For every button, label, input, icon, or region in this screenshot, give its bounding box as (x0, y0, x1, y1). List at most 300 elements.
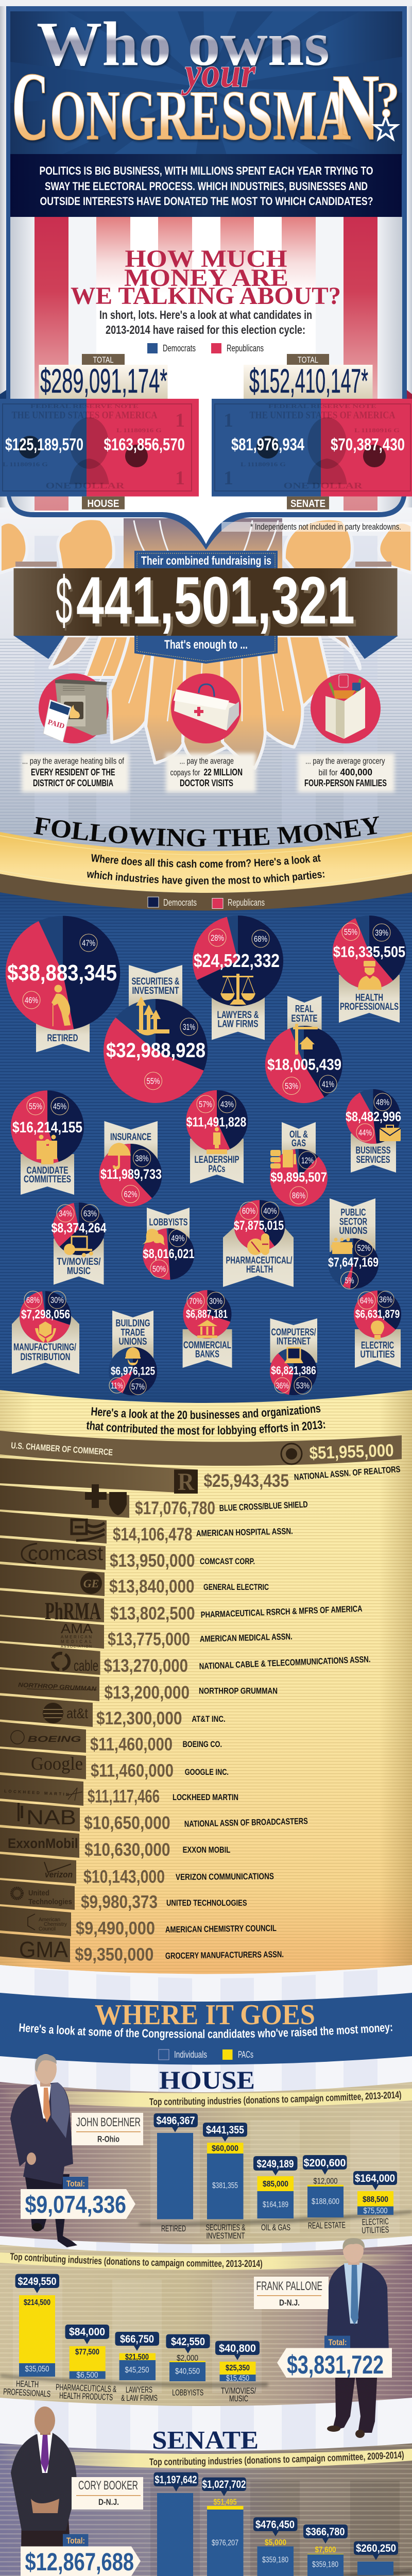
pie chart: lawyers and law firms (193, 916, 283, 1040)
pie chart: retired: 47% (82, 938, 95, 948)
bar: PhRMA: $13,802,500 (110, 1604, 195, 1624)
bar chart: Boehner industries: ELECTRIC (362, 2216, 389, 2227)
pie chart: leadership PACs: 43% (220, 1099, 234, 1109)
bar: Comcast (0, 1538, 255, 1571)
pie chart: building trade unions: UNIONS (118, 1336, 147, 1347)
icon: hardhat (125, 1347, 141, 1365)
pie chart: oil and gas: $9,895,507 (270, 1170, 327, 1185)
name card: Frank Pallone (254, 2277, 329, 2309)
chart caption: Top contributing industries (donations to campaign committee, 2013-2014) (10, 2253, 262, 2269)
text block: where does the cash come from: which industries have given the most to which parties: (87, 871, 324, 887)
dollar bill: house (0, 399, 199, 497)
panel: following the money header arc (0, 816, 412, 911)
bar chart: Pallone industries: $42,550 (171, 2336, 205, 2348)
caption: heating bills (22, 753, 129, 792)
bar chart: Booker industries: $476,450 (255, 2519, 295, 2531)
pie chart: business services: 44% (358, 1128, 372, 1138)
pie chart: lobbyists: 49% (171, 1233, 184, 1243)
icon: briefcase (380, 1125, 401, 1141)
bar: Grocery Manufacturers Assn.: $9,350,000 (75, 1945, 153, 1965)
pie chart: candidate committees: 55% (29, 1101, 42, 1111)
bar: AT&T: $12,300,000 (96, 1708, 182, 1728)
heading: following the money: FOLLOWING THE MONEY (33, 816, 379, 847)
pie chart: tv movies music (52, 1202, 107, 1285)
pie chart: retired: RETIRED (47, 1033, 78, 1044)
legend: individuals and PACs: Individuals (174, 2049, 207, 2060)
bar: Boeing: BOEING CO. (183, 1739, 222, 1749)
pie chart: manufacturing distribution: MANUFACTURING/ (13, 1342, 76, 1353)
icon: scales (220, 974, 255, 1005)
bar: Boeing: $11,460,000 (90, 1734, 173, 1755)
pie chart: health professionals (333, 916, 406, 1023)
dollar bill: house: 1 (175, 467, 185, 489)
text block: in short: In short, lots. Here's a look at what candidates in (99, 308, 312, 321)
panel: house total: TOTAL (93, 355, 113, 365)
icon: tv and film reel (64, 1236, 93, 1257)
bar: Northrop Grumman: $13,200,000 (104, 1683, 190, 1703)
total raised: John Boehner: Total: (66, 2179, 85, 2189)
text block: lobbying intro: that contributed the most for lobbying efforts in 2013: (87, 1420, 325, 1436)
bar chart: Pallone industries: HEALTH PRODUCTS (59, 2391, 113, 2402)
bar: General Electric: $13,840,000 (109, 1577, 195, 1597)
caption: grocery bill: 400,000 (340, 767, 372, 777)
pie chart: securities and investment: SECURITIES & (132, 976, 180, 987)
icon: people (37, 1134, 57, 1164)
bar: National Assn of Broadcasters: NAB (26, 1806, 76, 1829)
bar: American Hospital Assn. (0, 1512, 293, 1545)
figure: Frank Pallone (327, 2238, 389, 2438)
bar: U.S. Chamber of Commerce: U.S. CHAMBER OF COMMERCE (11, 1440, 113, 1458)
label: that's enough to: That's enough to ... (164, 638, 248, 652)
bar: United Technologies: United (28, 1889, 49, 1897)
pie chart: insurance: INSURANCE (110, 1132, 151, 1143)
icon: elderly person (52, 985, 71, 1026)
bar chart: Pallone industries: $45,250 (125, 2366, 149, 2375)
total raised: Cory Booker: Total: (66, 2536, 85, 2546)
pie chart: insurance: 62% (124, 1189, 137, 1199)
total raised: John Boehner: $9,074,336 (25, 2191, 126, 2218)
bar: United Technologies: Technologies (28, 1897, 72, 1906)
bar: National Assn of Broadcasters (0, 1801, 308, 1833)
bar: Northrop Grumman: NORTHROP GRUMMAN (18, 1681, 97, 1692)
legend: donor parties: Democrats (163, 897, 197, 908)
heading: how much money (71, 245, 341, 310)
caption: doctor visits (166, 753, 256, 792)
bar chart: top 20 lobbying spenders (0, 1431, 402, 1965)
pie chart: lobbyists: 50% (152, 1264, 166, 1274)
pie chart: business services: BUSINESS (355, 1145, 390, 1156)
panel: intro text band (10, 154, 402, 217)
pie chart: electric utilities: ELECTRIC (361, 1341, 394, 1351)
pie chart: lawyers and law firms: 68% (254, 934, 267, 944)
dollar bill: senate (212, 399, 412, 497)
pie chart: building trade unions: 57% (131, 1382, 145, 1392)
dollar bill: senate: ONE DOLLAR (283, 481, 363, 490)
tag: senate: SENATE (290, 498, 325, 510)
bar: American Medical Assn.: $13,775,000 (108, 1630, 190, 1650)
pie chart: manufacturing distribution (12, 1291, 79, 1374)
bar chart: Boehner industries: $60,000 (212, 2144, 238, 2153)
caption: grocery bill: ... pay the average grocery (305, 756, 385, 766)
pie chart: commercial banks: 70% (189, 1296, 202, 1306)
pie chart: retired (6, 916, 120, 1052)
pie chart: oil and gas: 12% (301, 1156, 314, 1165)
name card: John Boehner: R-Ohio (97, 2134, 119, 2144)
icon: union workers (331, 1238, 353, 1254)
icon: star (374, 116, 397, 139)
panel: Frank Pallone (0, 2244, 412, 2406)
bar chart: Boehner industries: $88,500 (363, 2195, 388, 2204)
panel: senate total (244, 354, 373, 400)
bar chart: Pallone industries: LAWYERS (126, 2385, 152, 2395)
pie chart: tv movies music: $8,374,264 (52, 1220, 107, 1235)
bar chart: Boehner industries: $188,600 (312, 2197, 339, 2206)
bar chart: Pallone industries: $214,500 (24, 2298, 50, 2307)
icon: grocery bag (325, 675, 365, 739)
item: grocery bill (298, 673, 394, 792)
pie chart: lobbyists: LOBBYISTS (149, 1217, 187, 1228)
pie chart: business services: $8,482,996 (346, 1109, 401, 1124)
bar chart: Boehner industries (139, 2113, 412, 2241)
hands and fingers illustration (0, 518, 412, 768)
bar chart: Boehner industries: UTILITIES (362, 2225, 389, 2235)
pie chart: oil and gas: GAS (291, 1138, 306, 1149)
pie chart: securities and investment: INVESTMENT (132, 986, 179, 996)
text block: candidates intro: Here's a look at some of the Congressional candidates who've raised the most money: (19, 2023, 392, 2040)
name card: John Boehner: JOHN BOEHNER (76, 2115, 141, 2129)
pie chart: securities and investment: 31% (183, 1022, 195, 1032)
panel: house total (39, 354, 168, 400)
pie chart: real estate: ESTATE (291, 1013, 317, 1024)
legend: donor parties (148, 897, 265, 909)
bar: American Chemistry Council (0, 1906, 277, 1939)
pie chart: oil and gas: 86% (292, 1191, 305, 1200)
pie chart: leadership PACs: PACs (208, 1164, 226, 1175)
blue frame with speech-bubble point (6, 6, 407, 550)
pie chart: computers internet: 36% (276, 1381, 289, 1391)
bar: Boeing (0, 1722, 222, 1755)
title word: Congressman (12, 53, 400, 161)
bar: American Medical Assn.: AMERICAN MEDICAL ASSN. (200, 1632, 293, 1644)
bar chart: Booker industries: $1,197,642 (154, 2474, 197, 2486)
bar chart: Pallone industries: $6,500 (76, 2371, 98, 2380)
label: combined fundraising: Their combined fundraising is (141, 554, 271, 567)
pie chart: commercial banks: BANKS (195, 1349, 219, 1360)
icon: bank (197, 1320, 217, 1338)
bar: American Chemistry Council: Chemistry (44, 1922, 67, 1927)
pie chart: real estate: $18,005,439 (267, 1055, 341, 1073)
pie chart: public sector unions: SECTOR (339, 1217, 367, 1227)
total raised: Cory Booker: $12,867,688 (25, 2549, 134, 2576)
bar chart: Boehner industries: $496,367 (157, 2115, 195, 2127)
panel: senate total: TOTAL (298, 355, 318, 365)
bar: National Assn. of Realtors: R (178, 1468, 195, 1496)
pie chart: leadership PACs: $11,491,828 (186, 1114, 246, 1129)
bar chart: Boehner industries: OIL & GAS (261, 2223, 290, 2232)
icon: podium (207, 1127, 227, 1154)
panel: John Boehner (0, 2054, 412, 2247)
total raised: Frank Pallone: $3,831,722 (287, 2350, 384, 2379)
bar chart: Pallone industries: $40,550 (175, 2367, 200, 2376)
bar: National Assn. of Realtors (0, 1458, 401, 1496)
pie chart: manufacturing distribution: 68% (26, 1295, 40, 1305)
caption: heating bills: ... pay the average heating bills of (22, 756, 124, 766)
panel: lobbying section (0, 1390, 412, 1974)
bar: National Cable and Telecommunications: $13,270,000 (104, 1656, 188, 1676)
bar chart: Boehner industries: $441,355 (206, 2124, 244, 2136)
pie chart: candidate committees (11, 1090, 84, 1195)
amount: house democrats: $125,189,570 (5, 435, 83, 454)
pie chart: business services (346, 1089, 401, 1173)
bar chart: Boehner industries: REAL ESTATE (308, 2220, 346, 2231)
figure: John Boehner (10, 2054, 77, 2247)
pie chart: candidate committees: $16,214,155 (12, 1119, 82, 1136)
bar chart: Pallone industries: $35,050 (25, 2365, 49, 2374)
pie chart: pharmaceutical health: PHARMACEUTICAL/ (226, 1255, 293, 1266)
pie chart: lobbyists: $8,016,021 (143, 1247, 195, 1261)
legend: parties: Democrats (163, 343, 196, 353)
pie chart: manufacturing distribution: DISTRIBUTION (21, 1352, 70, 1363)
icon: hands and box (35, 1321, 56, 1343)
caption: doctor visits: DOCTOR VISITS (180, 778, 233, 788)
heading: where it goes: WHERE IT GOES (95, 1999, 315, 2031)
bar: PhRMA (0, 1590, 363, 1625)
bar chart: Boehner industries: RETIRED (161, 2224, 186, 2233)
bar chart: Boehner industries: $75,500 (364, 2207, 388, 2215)
pie chart: building trade unions: $6,976,125 (111, 1365, 155, 1378)
name card: John Boehner (72, 2113, 143, 2145)
bar chart: Booker industries: $359,180 (262, 2556, 288, 2565)
pie chart: pharmaceutical health: 60% (242, 1206, 255, 1216)
pie chart: electric utilities: 64% (360, 1296, 373, 1306)
ribbon folds (0, 390, 412, 399)
bar: PhRMA: PHARMACEUTICAL RSRCH & MFRS OF AMERICA (200, 1604, 363, 1620)
chart caption: Top contributing industries (donations to campaign committee, 2009-2014) (149, 2451, 404, 2467)
bar chart: Booker industries: $1,027,702 (202, 2479, 246, 2490)
pie chart: tv movies music: TV/MOVIES/ (57, 1257, 101, 1267)
bar: American Medical Assn.: AMERICAN (61, 1635, 92, 1639)
pie chart: building trade unions: 11% (111, 1381, 123, 1391)
bar: Exxon Mobil (0, 1827, 230, 1860)
pie chart: securities and investment (104, 965, 208, 1103)
bar: General Electric: GENERAL ELECTRIC (203, 1582, 269, 1592)
bar: U.S. Chamber of Commerce (0, 1431, 402, 1466)
pie chart: commercial banks: 30% (209, 1296, 222, 1306)
bar: National Assn of Broadcasters: $10,650,000 (84, 1813, 170, 1833)
bar chart: Booker industries: $5,000 (265, 2538, 286, 2547)
text block: lobbying intro: Here's a look at the 20 businesses and organizations (91, 1405, 320, 1419)
bar: AT&T (0, 1696, 226, 1728)
bar chart: Booker industries: $7,600 (315, 2546, 336, 2554)
caption: doctor visits: copays for (170, 768, 200, 777)
panel: stripes background (10, 217, 402, 547)
pie chart: building trade unions: BUILDING (115, 1318, 150, 1329)
bar chart: Pallone industries: $15,450 (226, 2374, 249, 2383)
bar: American Chemistry Council: American (39, 1917, 60, 1923)
title word: Congressman: N (332, 55, 380, 160)
text block: in short: 2013-2014 have raised for this election cycle: (106, 323, 305, 336)
bar chart: Pallone industries: PROFESSIONALS (3, 2387, 51, 2399)
pie chart: public sector unions: UNIONS (339, 1226, 368, 1236)
text block: lobbying intro (87, 1405, 325, 1436)
bar chart: Pallone industries: PHARMACEUTICALS & (56, 2382, 117, 2394)
bar chart: Pallone industries: $84,000 (69, 2326, 105, 2338)
icon: furnace and paid bill (43, 679, 107, 742)
bar: Grocery Manufacturers Assn. (0, 1933, 284, 1965)
bar: Exxon Mobil: EXXON MOBIL (183, 1845, 230, 1855)
bar: Exxon Mobil: ExxonMobil (8, 1836, 78, 1851)
bar chart: Pallone industries: & LAW FIRMS (121, 2393, 158, 2403)
icon: doctor (358, 961, 382, 990)
bar: Boeing: BOEING (28, 1734, 81, 1744)
dollar bill: house: 1 (175, 410, 185, 431)
heading: how much money: HOW MUCH (125, 245, 287, 273)
pie chart: leadership PACs (186, 1090, 248, 1183)
bar chart: Boehner industries: $381,355 (212, 2181, 238, 2190)
amount: senate democrats: $81,976,934 (231, 435, 304, 454)
bar: American Medical Assn. (0, 1617, 293, 1650)
pie chart: computers internet: COMPUTERS/ (271, 1327, 316, 1338)
bar: Comcast: COMCAST CORP. (200, 1556, 255, 1566)
item: heating bills (22, 673, 129, 792)
bar: General Electric: GE (83, 1577, 99, 1590)
bar: Grocery Manufacturers Assn.: GMA (19, 1937, 68, 1962)
pie chart: leadership PACs: LEADERSHIP (195, 1155, 239, 1165)
icon: furnace and paid bill: PAID (47, 718, 65, 731)
figure: Cory Booker (11, 2406, 77, 2576)
pie chart: real estate: REAL (295, 1004, 314, 1015)
chart caption: Top contributing industries (donations to campaign committee, 2013-2014) (149, 2091, 401, 2107)
pie chart: building trade unions: TRADE (121, 1327, 145, 1338)
bar: United Technologies: $9,980,373 (81, 1892, 158, 1912)
pie chart: pharmaceutical health: $7,875,015 (234, 1218, 284, 1233)
title word: Congressman: C (12, 53, 49, 161)
name card: Frank Pallone: D-N.J. (279, 2298, 300, 2308)
pie chart: tv movies music: 34% (59, 1209, 72, 1218)
bar: Lockheed Martin (0, 1775, 238, 1807)
pie chart: computers internet: INTERNET (277, 1336, 311, 1347)
panel: combined total: $ (56, 563, 72, 638)
pie chart: lobbyists (142, 1208, 195, 1280)
legend: donor parties: Republicans (228, 897, 265, 908)
bar: Blue Cross Blue Shield: BLUE CROSS/BLUE SHIELD (219, 1500, 308, 1513)
legend: parties (147, 343, 264, 353)
bar chart: Booker industries: $359,180 (312, 2561, 338, 2569)
panel: grey striped background behind hands (0, 507, 412, 858)
pie chart: business services: 48% (376, 1097, 389, 1107)
icon: light bulb (371, 1320, 384, 1340)
bar chart: Boehner industries: $12,000 (313, 2177, 338, 2186)
pie chart: computers internet: 53% (296, 1381, 310, 1391)
bar: American Medical Assn.: MEDICAL (61, 1639, 92, 1644)
bar: Exxon Mobil: $10,630,000 (84, 1840, 170, 1860)
pie chart: real estate: 41% (322, 1079, 334, 1089)
pie chart: real estate (265, 996, 342, 1103)
dollar bill: house: ONE DOLLAR (45, 481, 125, 490)
bar chart: Boehner industries: $164,189 (263, 2200, 288, 2209)
pie chart: oil and gas (270, 1122, 328, 1207)
bar chart: Pallone industries: $249,550 (18, 2276, 57, 2287)
bar chart: Booker industries: $366,780 (306, 2526, 345, 2538)
bar: American Chemistry Council: Council (39, 1926, 56, 1932)
bar chart: Boehner industries: $249,189 (256, 2158, 294, 2170)
pie chart: public sector unions: $7,647,169 (328, 1256, 379, 1270)
ribbon ends (14, 636, 398, 659)
bar chart: Booker industries: $51,495 (213, 2498, 237, 2506)
pie chart: leadership PACs: 57% (199, 1099, 212, 1109)
pie chart: lawyers and law firms: LAW FIRMS (217, 1019, 259, 1030)
bar chart: Booker industries (139, 2472, 412, 2576)
pie chart: health professionals: HEALTH (355, 992, 383, 1004)
bar chart: Boehner industries: $85,000 (263, 2180, 288, 2189)
icon: speech bubbles (142, 1229, 165, 1245)
bar: Google: GOOGLE INC. (185, 1767, 229, 1777)
bar: Verizon (0, 1854, 274, 1887)
dollar bill: house: FEDERAL RESERVE NOTE (30, 403, 139, 410)
name card: Frank Pallone: FRANK PALLONE (256, 2279, 322, 2293)
total raised: Cory Booker (21, 2534, 141, 2576)
bar: Lockheed Martin: LOCKHEED MARTIN (4, 1789, 69, 1797)
bar: Blue Cross Blue Shield (0, 1484, 308, 1518)
pie chart: manufacturing distribution: 30% (50, 1295, 64, 1305)
pie chart: candidate committees: 45% (53, 1101, 66, 1111)
pie chart: public sector unions: 5% (345, 1276, 354, 1285)
pie chart: commercial banks: $6,887,181 (186, 1308, 228, 1320)
pie chart: electric utilities (354, 1291, 401, 1368)
caption: doctor visits: ... pay the average (179, 756, 234, 766)
item: doctor visits (166, 673, 256, 792)
panel: combined total: $ (57, 565, 74, 640)
heading: how much money: MONEY ARE (124, 264, 288, 292)
name card: Cory Booker: D-N.J. (98, 2497, 119, 2507)
bar chart: Pallone industries: $25,350 (226, 2364, 250, 2372)
icon: house sign (293, 1024, 318, 1055)
pie chart: real estate: 53% (285, 1081, 298, 1091)
dollar bill: house: L 11180916 G (3, 461, 48, 468)
bar: PhRMA: PhRMA (45, 1598, 101, 1625)
pie chart: public sector unions: 52% (357, 1243, 371, 1253)
bar: Blue Cross Blue Shield: $17,076,780 (135, 1498, 215, 1518)
bar: American Chemistry Council: $9,490,000 (76, 1919, 155, 1939)
pie chart: insurance (99, 1121, 162, 1207)
bar chart: Booker industries: $976,207 (212, 2539, 238, 2548)
pie chart: public sector unions: PUBLIC (341, 1208, 366, 1218)
dollar bill: house: L 11180916 G (116, 427, 162, 434)
side shading left (0, 6, 6, 521)
caption: doctor visits: 22 MILLION (204, 767, 243, 777)
bar: Comcast: $13,950,000 (110, 1551, 195, 1571)
legend: individuals and PACs: PACs (238, 2049, 253, 2060)
pie chart: retired: $38,883,345 (7, 960, 117, 986)
caption: grocery bill: bill for (318, 768, 338, 777)
bar: Grocery Manufacturers Assn.: GROCERY MANUFACTURERS ASSN. (165, 1950, 284, 1961)
bar: Lockheed Martin: $11,117,466 (88, 1787, 160, 1807)
text block: where does the cash come from: Where does all this cash come from? Here's a look at (92, 854, 321, 868)
name card: Cory Booker: CORY BOOKER (78, 2479, 138, 2493)
pie chart: insurance: 38% (135, 1154, 148, 1163)
title word: Congressman: ? (376, 72, 400, 128)
title line: Who owns: Who owns (37, 9, 330, 79)
bar chart: Pallone industries: MUSIC (229, 2394, 248, 2403)
pie chart: business services: SERVICES (356, 1155, 390, 1165)
caption: heating bills: EVERY RESIDENT OF THE (31, 767, 115, 777)
total raised: Frank Pallone: Total: (329, 2337, 347, 2347)
pie chart: insurance: $11,989,733 (100, 1166, 162, 1182)
bar: Northrop Grumman: NORTHROP GRUMMAN (199, 1686, 278, 1696)
pie chart: commercial banks: COMMERCIAL (183, 1340, 231, 1351)
dollar bill: senate: L 11180916 G (241, 461, 286, 468)
caption: grocery bill (298, 753, 394, 792)
